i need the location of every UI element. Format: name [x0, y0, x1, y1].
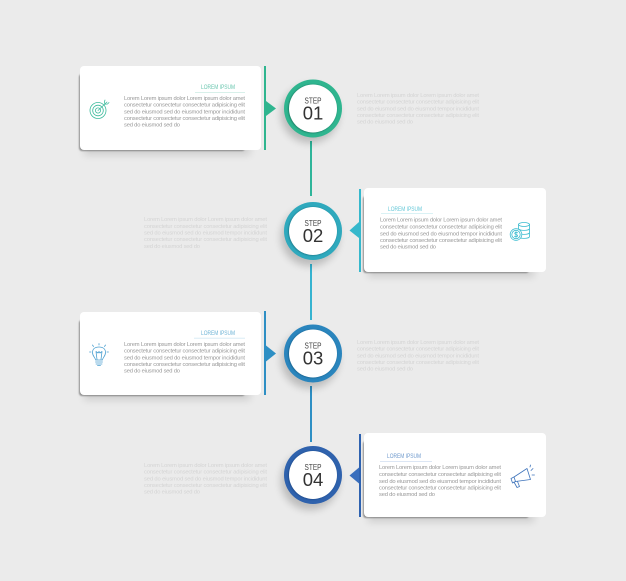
text block: step 1 side note: sed do eiusmod sed do eiusmod tempor incididunt [357, 106, 479, 112]
text block: step 4 body: Lorem Lorem ipsum dolor Lorem ipsum dolor amet [379, 465, 501, 471]
step 4 badge: 04 [303, 469, 323, 490]
icon: light bulb [90, 344, 108, 366]
text block: step 4 side note: Lorem Lorem ipsum dolor Lorem ipsum dolor amet [144, 463, 267, 469]
text block: step 2 body: Lorem Lorem ipsum dolor Lorem ipsum dolor amet [380, 218, 502, 224]
step 2 badge: 02 [303, 225, 323, 246]
step 3 badge: 03 [303, 348, 323, 368]
text block: step 3 body: consectetur consectetur consectetur adipisicing elit [124, 362, 245, 368]
text block: step 3 body: sed do eiusmod sed do [124, 369, 180, 375]
heading: step 4 title [380, 453, 432, 462]
text block: step 2 body [380, 218, 502, 251]
step 2 badge [281, 202, 342, 266]
text block: step 4 side note: consectetur consectetur consectetur adipisicing elit [144, 483, 267, 489]
text block: step 4 body: consectetur consectetur consectetur adipisicing elit [379, 472, 501, 478]
icon: megaphone [511, 465, 534, 488]
text block: step 3 side note: consectetur consectetur consectetur adipisicing elit [357, 360, 479, 366]
panel: step 4 card [363, 433, 546, 522]
text block: step 1 side note: consectetur consectetur consectetur adipisicing elit [357, 100, 479, 106]
divider and pointer: step 3 [264, 311, 276, 395]
step 1 badge: 01 [303, 102, 323, 124]
heading: step 4 title: LOREM IPSUM [387, 453, 421, 460]
text block: step 4 side note: sed do eiusmod sed do eiusmod tempor incididunt [144, 476, 267, 482]
heading: step 3 title: LOREM IPSUM [201, 330, 235, 337]
text block: step 2 side note: Lorem Lorem ipsum dolor Lorem ipsum dolor amet [144, 217, 267, 223]
text block: step 1 body: consectetur consectetur consectetur adipisicing elit [124, 103, 245, 109]
divider and pointer: step 2 [350, 189, 361, 272]
text block: step 2 body: consectetur consectetur consectetur adipisicing elit [380, 238, 502, 244]
text block: step 2 side note: sed do eiusmod sed do eiusmod tempor incididunt [144, 230, 267, 236]
text block: step 2 body: sed do eiusmod sed do [380, 245, 436, 251]
step 2 badge: STEP [304, 219, 322, 228]
text block: step 3 body: Lorem Lorem ipsum dolor Lorem ipsum dolor amet [124, 342, 245, 348]
text block: step 4 side note: sed do eiusmod sed do [144, 490, 200, 496]
step 1 badge: STEP [304, 96, 322, 105]
text block: step 4 body: sed do eiusmod sed do [379, 492, 435, 498]
step 1 badge [281, 80, 342, 143]
text block: step 4 body [379, 465, 501, 498]
text block: step 1 body: Lorem Lorem ipsum dolor Lorem ipsum dolor amet [124, 96, 245, 102]
text block: step 1 side note [357, 93, 479, 126]
timeline connector 1 [310, 141, 312, 196]
text block: step 1 body: consectetur consectetur consectetur adipisicing elit [124, 116, 245, 122]
text block: step 3 body: consectetur consectetur consectetur adipisicing elit [124, 349, 245, 355]
text block: step 2 side note: sed do eiusmod sed do [144, 244, 200, 250]
text block: step 4 side note [144, 463, 267, 496]
text block: step 2 body: consectetur consectetur consectetur adipisicing elit [380, 225, 502, 231]
text block: step 1 side note: consectetur consectetur consectetur adipisicing elit [357, 113, 479, 119]
text block: step 3 side note: sed do eiusmod sed do [357, 367, 413, 373]
text block: step 3 side note [357, 340, 479, 373]
text block: step 3 body: sed do eiusmod sed do eiusmod tempor incididunt [124, 356, 245, 362]
text block: step 1 body: sed do eiusmod sed do eiusmod tempor incididunt [124, 109, 245, 115]
text block: step 2 side note: consectetur consectetur consectetur adipisicing elit [144, 224, 267, 230]
text block: step 2 body: sed do eiusmod sed do eiusmod tempor incididunt [380, 232, 502, 238]
text block: step 4 body: consectetur consectetur consectetur adipisicing elit [379, 485, 501, 491]
text block: step 3 side note: consectetur consectetur consectetur adipisicing elit [357, 347, 479, 353]
heading: step 2 title: LOREM IPSUM [388, 206, 422, 213]
icon: coins [510, 222, 530, 240]
icon: target [90, 100, 109, 118]
timeline connector 3 [310, 386, 312, 442]
text block: step 3 body [124, 342, 245, 375]
text block: step 1 side note: Lorem Lorem ipsum dolor Lorem ipsum dolor amet [357, 93, 479, 99]
text block: step 2 side note [144, 217, 267, 250]
step 4 badge [281, 446, 342, 510]
text block: step 1 body: sed do eiusmod sed do [124, 122, 180, 128]
heading: step 1 title: LOREM IPSUM [201, 84, 235, 91]
step 4 badge: STEP [304, 463, 322, 472]
panel: step 1 card [79, 66, 261, 155]
divider and pointer: step 1 [264, 66, 276, 150]
text block: step 3 side note: Lorem Lorem ipsum dolor Lorem ipsum dolor amet [357, 340, 479, 346]
step 3 badge: STEP [304, 341, 322, 350]
panel: step 2 card [363, 188, 546, 277]
text block: step 2 side note: consectetur consectetur consectetur adipisicing elit [144, 237, 267, 243]
step 3 badge [281, 324, 342, 388]
text block: step 4 side note: consectetur consectetur consectetur adipisicing elit [144, 470, 267, 476]
text block: step 4 body: sed do eiusmod sed do eiusmod tempor incididunt [379, 479, 501, 485]
panel: step 3 card [79, 312, 261, 400]
text block: step 1 body [124, 96, 245, 128]
text block: step 3 side note: sed do eiusmod sed do eiusmod tempor incididunt [357, 353, 479, 359]
divider and pointer: step 4 [350, 434, 361, 517]
text block: step 1 side note: sed do eiusmod sed do [357, 120, 413, 126]
timeline connector 2 [310, 264, 312, 320]
